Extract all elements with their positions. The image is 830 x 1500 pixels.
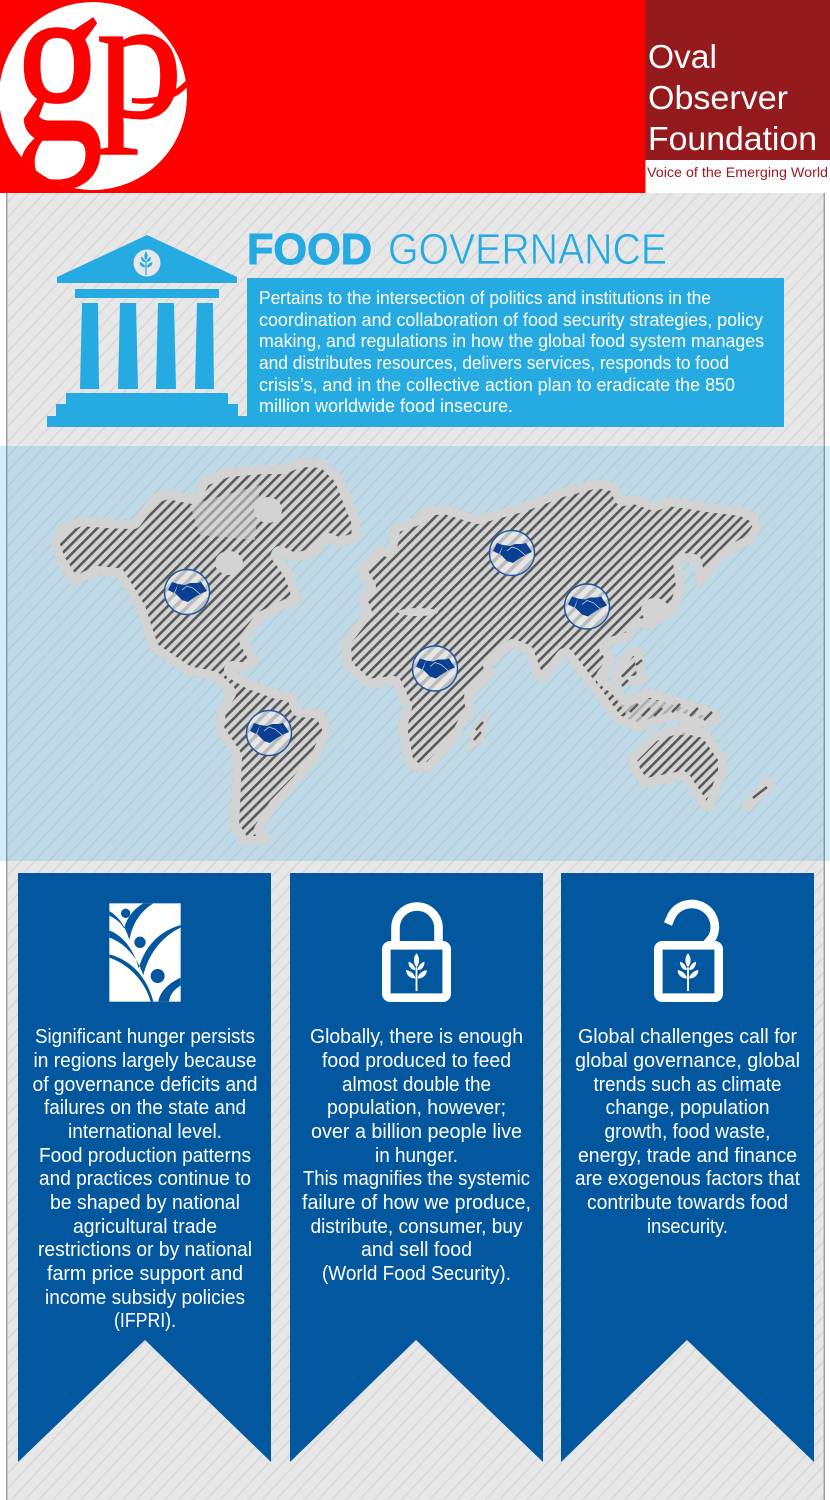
icon: people rising	[109, 903, 181, 1002]
icon: handshake Africa	[412, 646, 458, 691]
text: global challenges: insecurity.	[647, 1216, 728, 1238]
world map	[50, 458, 776, 845]
icon: handshake Asia	[564, 584, 610, 629]
text: hunger persists: restrictions or by national	[38, 1239, 252, 1261]
icon: handshake North America	[164, 570, 210, 614]
text: global challenges: are exogenous factors that	[575, 1168, 800, 1190]
text: enough food: (World Food Security).	[322, 1263, 511, 1285]
text: hunger persists: income subsidy policies	[45, 1287, 245, 1309]
icon: closed padlock with wheat	[386, 907, 447, 998]
panel: definition text: and distributes resources, delivers services, responds to food	[259, 352, 729, 373]
text: hunger persists: Food production patterns	[39, 1145, 251, 1167]
title: FOOD	[247, 225, 372, 274]
text: global challenges: contribute towards food	[587, 1192, 788, 1214]
text: enough food: distribute, consumer, buy	[310, 1216, 522, 1238]
text: enough food	[302, 1026, 531, 1285]
title	[247, 225, 667, 274]
text: enough food: in hunger.	[375, 1145, 458, 1167]
text: global challenges: Global challenges call for	[578, 1026, 797, 1048]
foundation name panel	[646, 0, 830, 193]
panel: governance deficits banner	[18, 873, 271, 1462]
text: global challenges: global governance, global	[575, 1050, 800, 1072]
text: enough food: food produced to feed	[322, 1050, 511, 1072]
icon: temple with wheat emblem	[47, 235, 250, 427]
panel: world map band	[0, 446, 830, 861]
text: hunger persists: failures on the state and	[44, 1097, 246, 1119]
foundation name panel: Voice of the Emerging World	[647, 164, 828, 180]
text: enough food: population, however;	[327, 1097, 506, 1119]
text: enough food: This magnifies the systemic	[303, 1168, 530, 1190]
icon: handshake South America	[246, 710, 292, 756]
text: hunger persists: Significant hunger persists	[35, 1026, 255, 1048]
text: global challenges: change, population	[606, 1097, 770, 1119]
text: hunger persists: farm price support and	[47, 1263, 243, 1285]
panel: definition text: million worldwide food insecure.	[259, 395, 513, 416]
panel: definition text: making, and regulations in how the global food system manages	[259, 330, 764, 351]
text: enough food: over a billion people live	[311, 1121, 522, 1143]
panel: definition text: crisis’s, and in the collective action plan to eradicate the 850	[259, 374, 735, 395]
text: enough food: almost double the	[342, 1074, 491, 1096]
foundation name panel: Foundation	[648, 121, 817, 158]
icon: handshake Russia	[490, 530, 534, 576]
text: hunger persists: agricultural trade	[73, 1216, 217, 1238]
header banner	[0, 0, 830, 193]
text: hunger persists: and practices continue to	[39, 1168, 251, 1190]
text: hunger persists	[32, 1026, 258, 1332]
foundation name panel: Observer	[648, 80, 788, 117]
title: GOVERNANCE	[388, 225, 667, 274]
text: hunger persists: in regions largely because	[34, 1050, 256, 1072]
text: enough food: and sell food	[361, 1239, 472, 1261]
text: global challenges: energy, trade and finance	[578, 1145, 797, 1167]
foundation name panel: Oval	[648, 39, 717, 76]
text: hunger persists: (IFPRI).	[114, 1310, 176, 1332]
panel: definition text	[247, 278, 784, 427]
text: global challenges	[575, 1026, 800, 1238]
text: enough food: failure of how we produce,	[302, 1192, 531, 1214]
text: hunger persists: be shaped by national	[50, 1192, 240, 1214]
panel: enough food banner	[290, 873, 543, 1462]
icon: open padlock with wheat	[658, 904, 719, 998]
text: hunger persists: of governance deficits and	[32, 1074, 258, 1096]
text: hunger persists: international level.	[68, 1121, 222, 1143]
panel: definition text: coordination and collaboration of food security strategies, policy	[259, 309, 764, 330]
panel: definition text: Pertains to the intersection of politics and institutions in the	[259, 287, 711, 308]
logo: gp	[0, 0, 188, 191]
text: enough food: Globally, there is enough	[310, 1026, 523, 1048]
text: global challenges: growth, food waste,	[604, 1121, 770, 1143]
text: global challenges: trends such as climate	[594, 1074, 782, 1096]
panel: global challenges banner	[561, 873, 814, 1462]
